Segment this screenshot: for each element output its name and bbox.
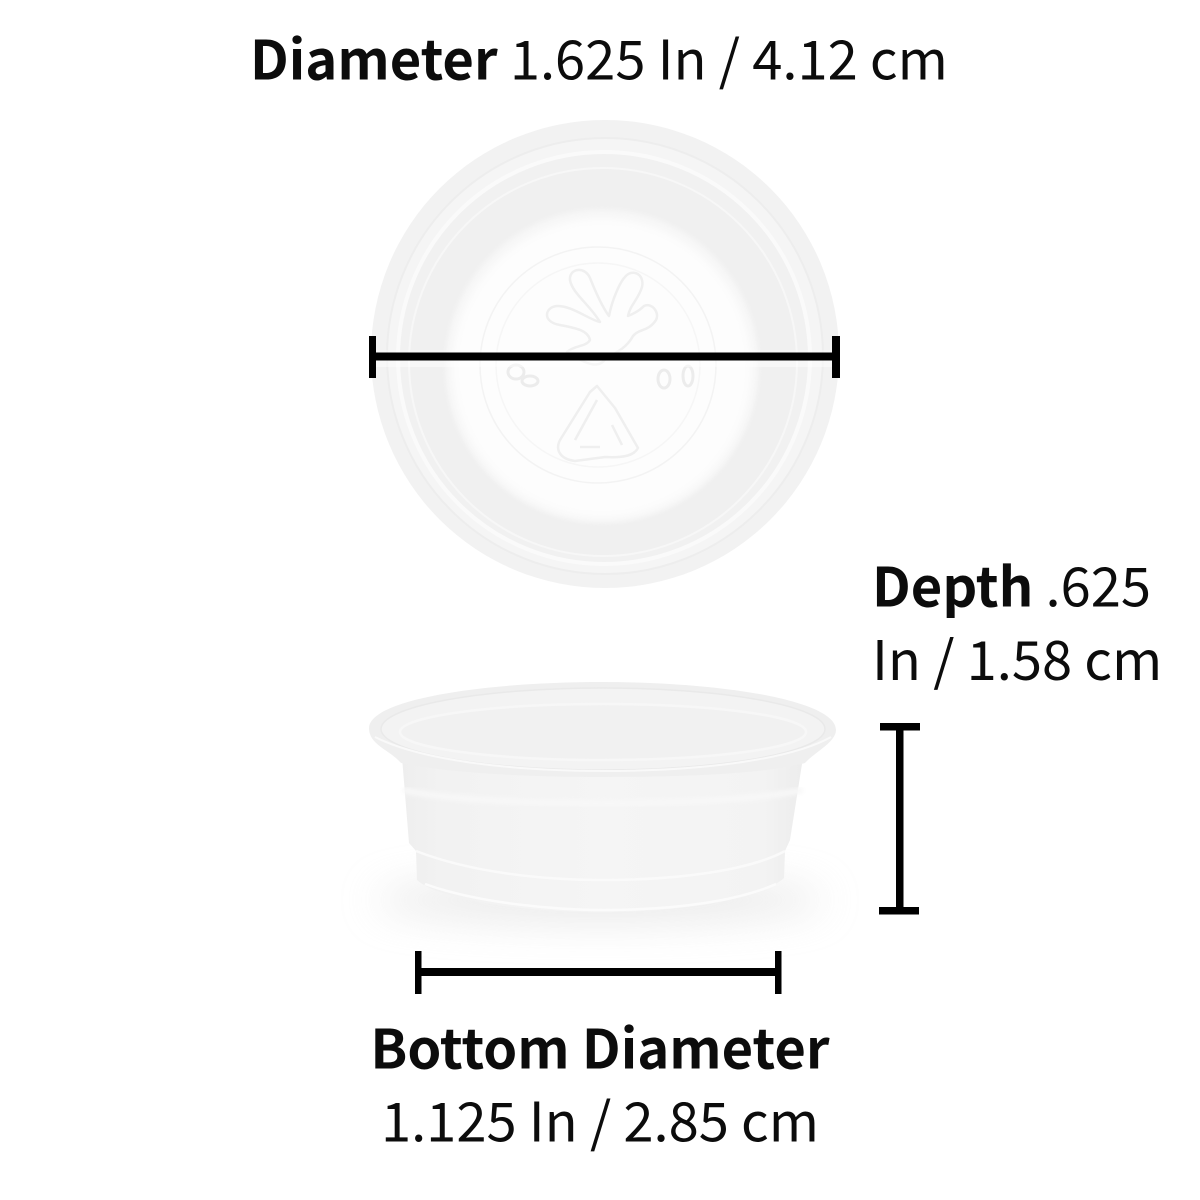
top view of cup: [371, 120, 839, 588]
title: diameter: Diameter 1.625 In / 4.12 cm: [250, 16, 948, 96]
bottom diameter label: [370, 1006, 830, 1158]
bottom diameter measure bar: [415, 951, 782, 994]
depth label: In / 1.58 cm: [872, 617, 1162, 696]
diameter measure bar: [369, 336, 840, 378]
depth measure bar: [879, 723, 920, 914]
depth label: Depth .625: [872, 544, 1151, 622]
side view of cup: [369, 682, 836, 922]
embossed paw mark: [547, 270, 657, 365]
bottom diameter label: 1.125 In / 2.85 cm: [381, 1078, 819, 1158]
depth label: [872, 544, 1162, 696]
bottom diameter label: Bottom Diameter: [370, 1006, 830, 1084]
embossed recycle triangle: [558, 386, 638, 461]
embossed size marks: [508, 365, 693, 388]
